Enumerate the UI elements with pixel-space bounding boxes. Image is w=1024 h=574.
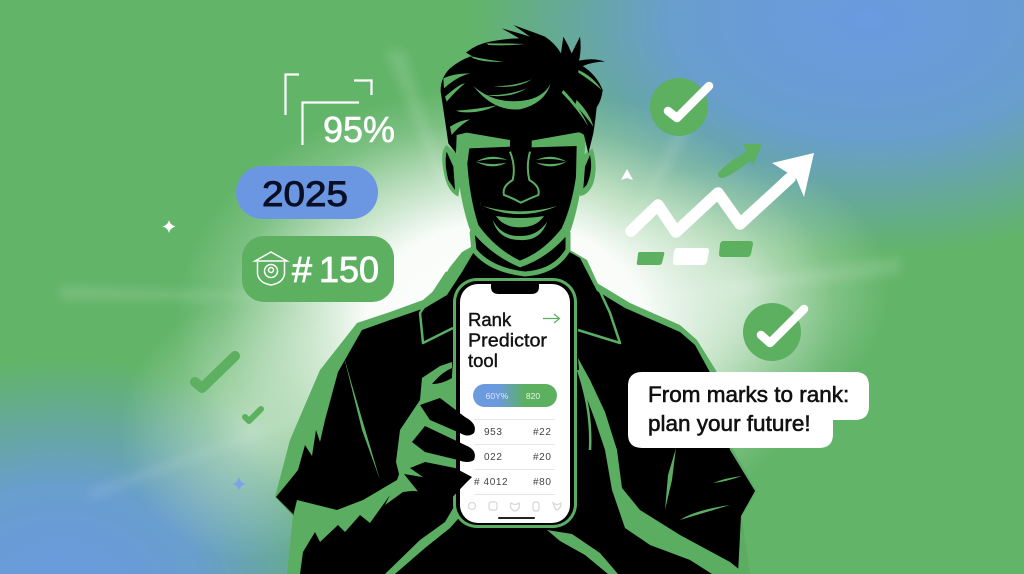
gradient score pill: [473, 384, 557, 407]
app title: Rank: [468, 309, 512, 330]
rank table: #20: [533, 452, 552, 463]
right forearm highlight: [578, 358, 745, 574]
notch: [491, 284, 539, 294]
rank value: 150: [319, 249, 379, 290]
year pill: [236, 166, 378, 219]
left big check: [195, 356, 235, 388]
head: [441, 25, 605, 267]
torso and arms: [275, 226, 757, 574]
year pill: 2025: [262, 174, 348, 214]
face: [455, 120, 587, 267]
rank value: #: [292, 249, 312, 290]
ears: [442, 145, 596, 197]
wrist line: [385, 500, 466, 574]
phone body: [453, 278, 577, 528]
left forearm highlight: [288, 463, 420, 574]
sparkle triangle: [621, 169, 633, 180]
left small check: [245, 409, 261, 421]
callout: [628, 372, 869, 448]
icon: mascot head: [255, 252, 287, 285]
callout: plan your future!: [648, 411, 811, 436]
rank table: 953: [484, 427, 502, 438]
check badge top: [650, 78, 709, 136]
neck collar ring: [472, 232, 568, 274]
gradient score pill: 60Y%: [486, 391, 509, 401]
eyes: [476, 157, 567, 166]
smile: [481, 202, 557, 240]
collar outlines: [420, 263, 620, 450]
hair: [441, 25, 605, 153]
right sleeve streaks: [665, 448, 676, 510]
hair highlights: [443, 43, 602, 135]
person illustration: [275, 25, 757, 574]
rank table: [474, 420, 555, 494]
face shadow: [467, 137, 577, 261]
rank pill: [242, 236, 394, 302]
home bar: [498, 517, 535, 519]
95% stat with brackets: 95%: [323, 109, 395, 150]
white growth arrow: [631, 153, 814, 232]
nose: [504, 152, 539, 203]
callout: From marks to rank:: [648, 382, 849, 407]
rank table: #80: [533, 477, 552, 488]
bottom nav icons: [468, 502, 561, 511]
fingers: [410, 398, 475, 484]
thumb: [432, 368, 452, 384]
app title: tool: [468, 350, 498, 371]
gradient score pill: 820: [526, 391, 540, 401]
sparkle blue: [232, 477, 246, 491]
palm shadow: [404, 474, 465, 505]
rank table: 022: [484, 452, 502, 463]
holding hand: [396, 362, 475, 505]
arrow: [543, 314, 560, 323]
check badge bottom: [743, 303, 804, 361]
95% stat with brackets: [286, 74, 395, 150]
app title: Predictor: [468, 330, 547, 350]
rank table: #22: [533, 427, 552, 438]
phone mockup: [453, 278, 577, 528]
phone screen: [460, 284, 570, 523]
bar dashes: [637, 241, 753, 265]
left sleeve streak: [343, 353, 380, 480]
rank table: # 4012: [474, 477, 508, 488]
lower hand fringe: [547, 530, 618, 574]
green small arrow: [718, 144, 762, 178]
sparkle white: [162, 220, 176, 233]
